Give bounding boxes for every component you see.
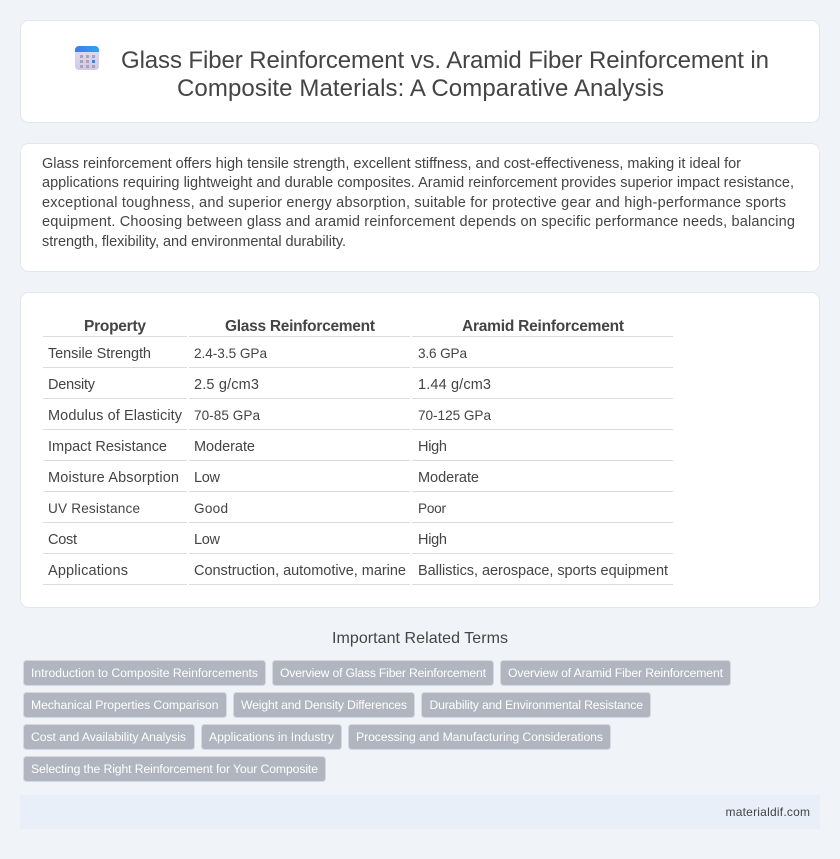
row: cost: Cost (48, 532, 77, 548)
tag: mechanical properties: Mechanical Properties Comparison (31, 698, 218, 712)
table header: Glass Reinforcement (225, 318, 375, 335)
row: impact resistance: Impact Resistance (48, 439, 167, 455)
tag: processing (348, 724, 610, 750)
footer bar (20, 795, 820, 829)
text block: summary paragraph: strength, flexibility, and environmental durability. (42, 234, 346, 250)
text block: summary paragraph: applications requiring lightweight and durable composites. Aramid reinforcement provides superior impact resistance, (42, 175, 794, 191)
row: tensile strength: Tensile Strength (48, 346, 151, 362)
tag: cost and availability: Cost and Availability Analysis (31, 730, 186, 744)
row: applications: Applications (48, 563, 128, 579)
table header (84, 318, 624, 335)
related term tags (24, 660, 730, 782)
tag: applications (202, 724, 342, 750)
panel: comparison table (20, 292, 820, 608)
tag: aramid overview (500, 660, 730, 686)
row: uv resistance (48, 501, 446, 516)
tag: cost and availability (24, 724, 194, 750)
title (121, 47, 769, 102)
row: uv resistance: UV Resistance (48, 501, 140, 516)
tag: glass overview (272, 660, 494, 686)
row: moisture absorption: Moderate (418, 470, 479, 486)
row: modulus of elasticity: Modulus of Elasticity (48, 408, 183, 424)
icon: calendar grid (75, 46, 99, 70)
row: moisture absorption (48, 470, 479, 486)
row: uv resistance: Good (194, 501, 228, 516)
tag: glass overview: Overview of Glass Fiber Reinforcement (280, 666, 487, 680)
row: impact resistance: High (418, 439, 447, 455)
row: tensile strength (48, 346, 467, 362)
tag: introduction (24, 660, 266, 686)
row: moisture absorption: Low (194, 470, 221, 486)
row: cost: High (418, 532, 447, 548)
row: density: 1.44 g/cm3 (418, 377, 491, 393)
row: density: Density (48, 377, 96, 393)
row: applications (48, 563, 668, 579)
tag: selecting (24, 756, 326, 782)
row: density: 2.5 g/cm3 (194, 377, 259, 393)
footer source: materialdif.com (726, 805, 810, 819)
row: tensile strength: 3.6 GPa (418, 346, 467, 361)
table header: Property (84, 318, 146, 335)
tag: selecting: Selecting the Right Reinforcement for Your Composite (31, 762, 318, 776)
tag: aramid overview: Overview of Aramid Fiber Reinforcement (508, 666, 724, 680)
row: uv resistance: Poor (418, 501, 446, 516)
panel: header (20, 20, 820, 122)
text block: summary paragraph (42, 156, 795, 250)
row: density (48, 377, 491, 393)
tag: weight and density (234, 692, 414, 718)
text block: summary paragraph: equipment. Choosing between glass and aramid reinforcement depends on specific performance needs, balancing (42, 214, 795, 230)
panel: summary text (20, 144, 820, 272)
row: moisture absorption: Moisture Absorption (48, 470, 179, 486)
title: Glass Fiber Reinforcement vs. Aramid Fiber Reinforcement in (121, 47, 769, 74)
row: applications: Ballistics, aerospace, sports equipment (418, 563, 668, 579)
table header: Aramid Reinforcement (462, 318, 624, 335)
row: cost: Low (194, 532, 221, 548)
tag: applications: Applications in Industry (209, 730, 335, 744)
tag: weight and density: Weight and Density Differences (241, 698, 407, 712)
row: tensile strength: 2.4-3.5 GPa (194, 346, 267, 361)
tag: introduction: Introduction to Composite Reinforcements (31, 666, 258, 680)
tag: mechanical properties (24, 692, 226, 718)
text block: summary paragraph: Glass reinforcement offers high tensile strength, excellent stiffness, and cost-effectiveness, making it ideal for (42, 156, 741, 172)
tag: processing: Processing and Manufacturing Considerations (356, 730, 603, 744)
text block: summary paragraph: exceptional toughness, and superior energy absorption, suitable for protective gear and high-performance sports (42, 195, 786, 211)
row: cost (48, 532, 447, 548)
row: modulus of elasticity: 70-125 GPa (418, 408, 491, 423)
heading: important related terms: Important Related Terms (332, 630, 508, 647)
row: impact resistance: Moderate (194, 439, 255, 455)
row: modulus of elasticity (48, 408, 491, 424)
row: impact resistance (48, 439, 447, 455)
row: applications: Construction, automotive, marine (194, 563, 406, 579)
tag: durability (422, 692, 650, 718)
row: modulus of elasticity: 70-85 GPa (194, 408, 260, 423)
tag: durability: Durability and Environmental Resistance (430, 698, 643, 712)
title: Composite Materials: A Comparative Analysis (177, 75, 664, 102)
